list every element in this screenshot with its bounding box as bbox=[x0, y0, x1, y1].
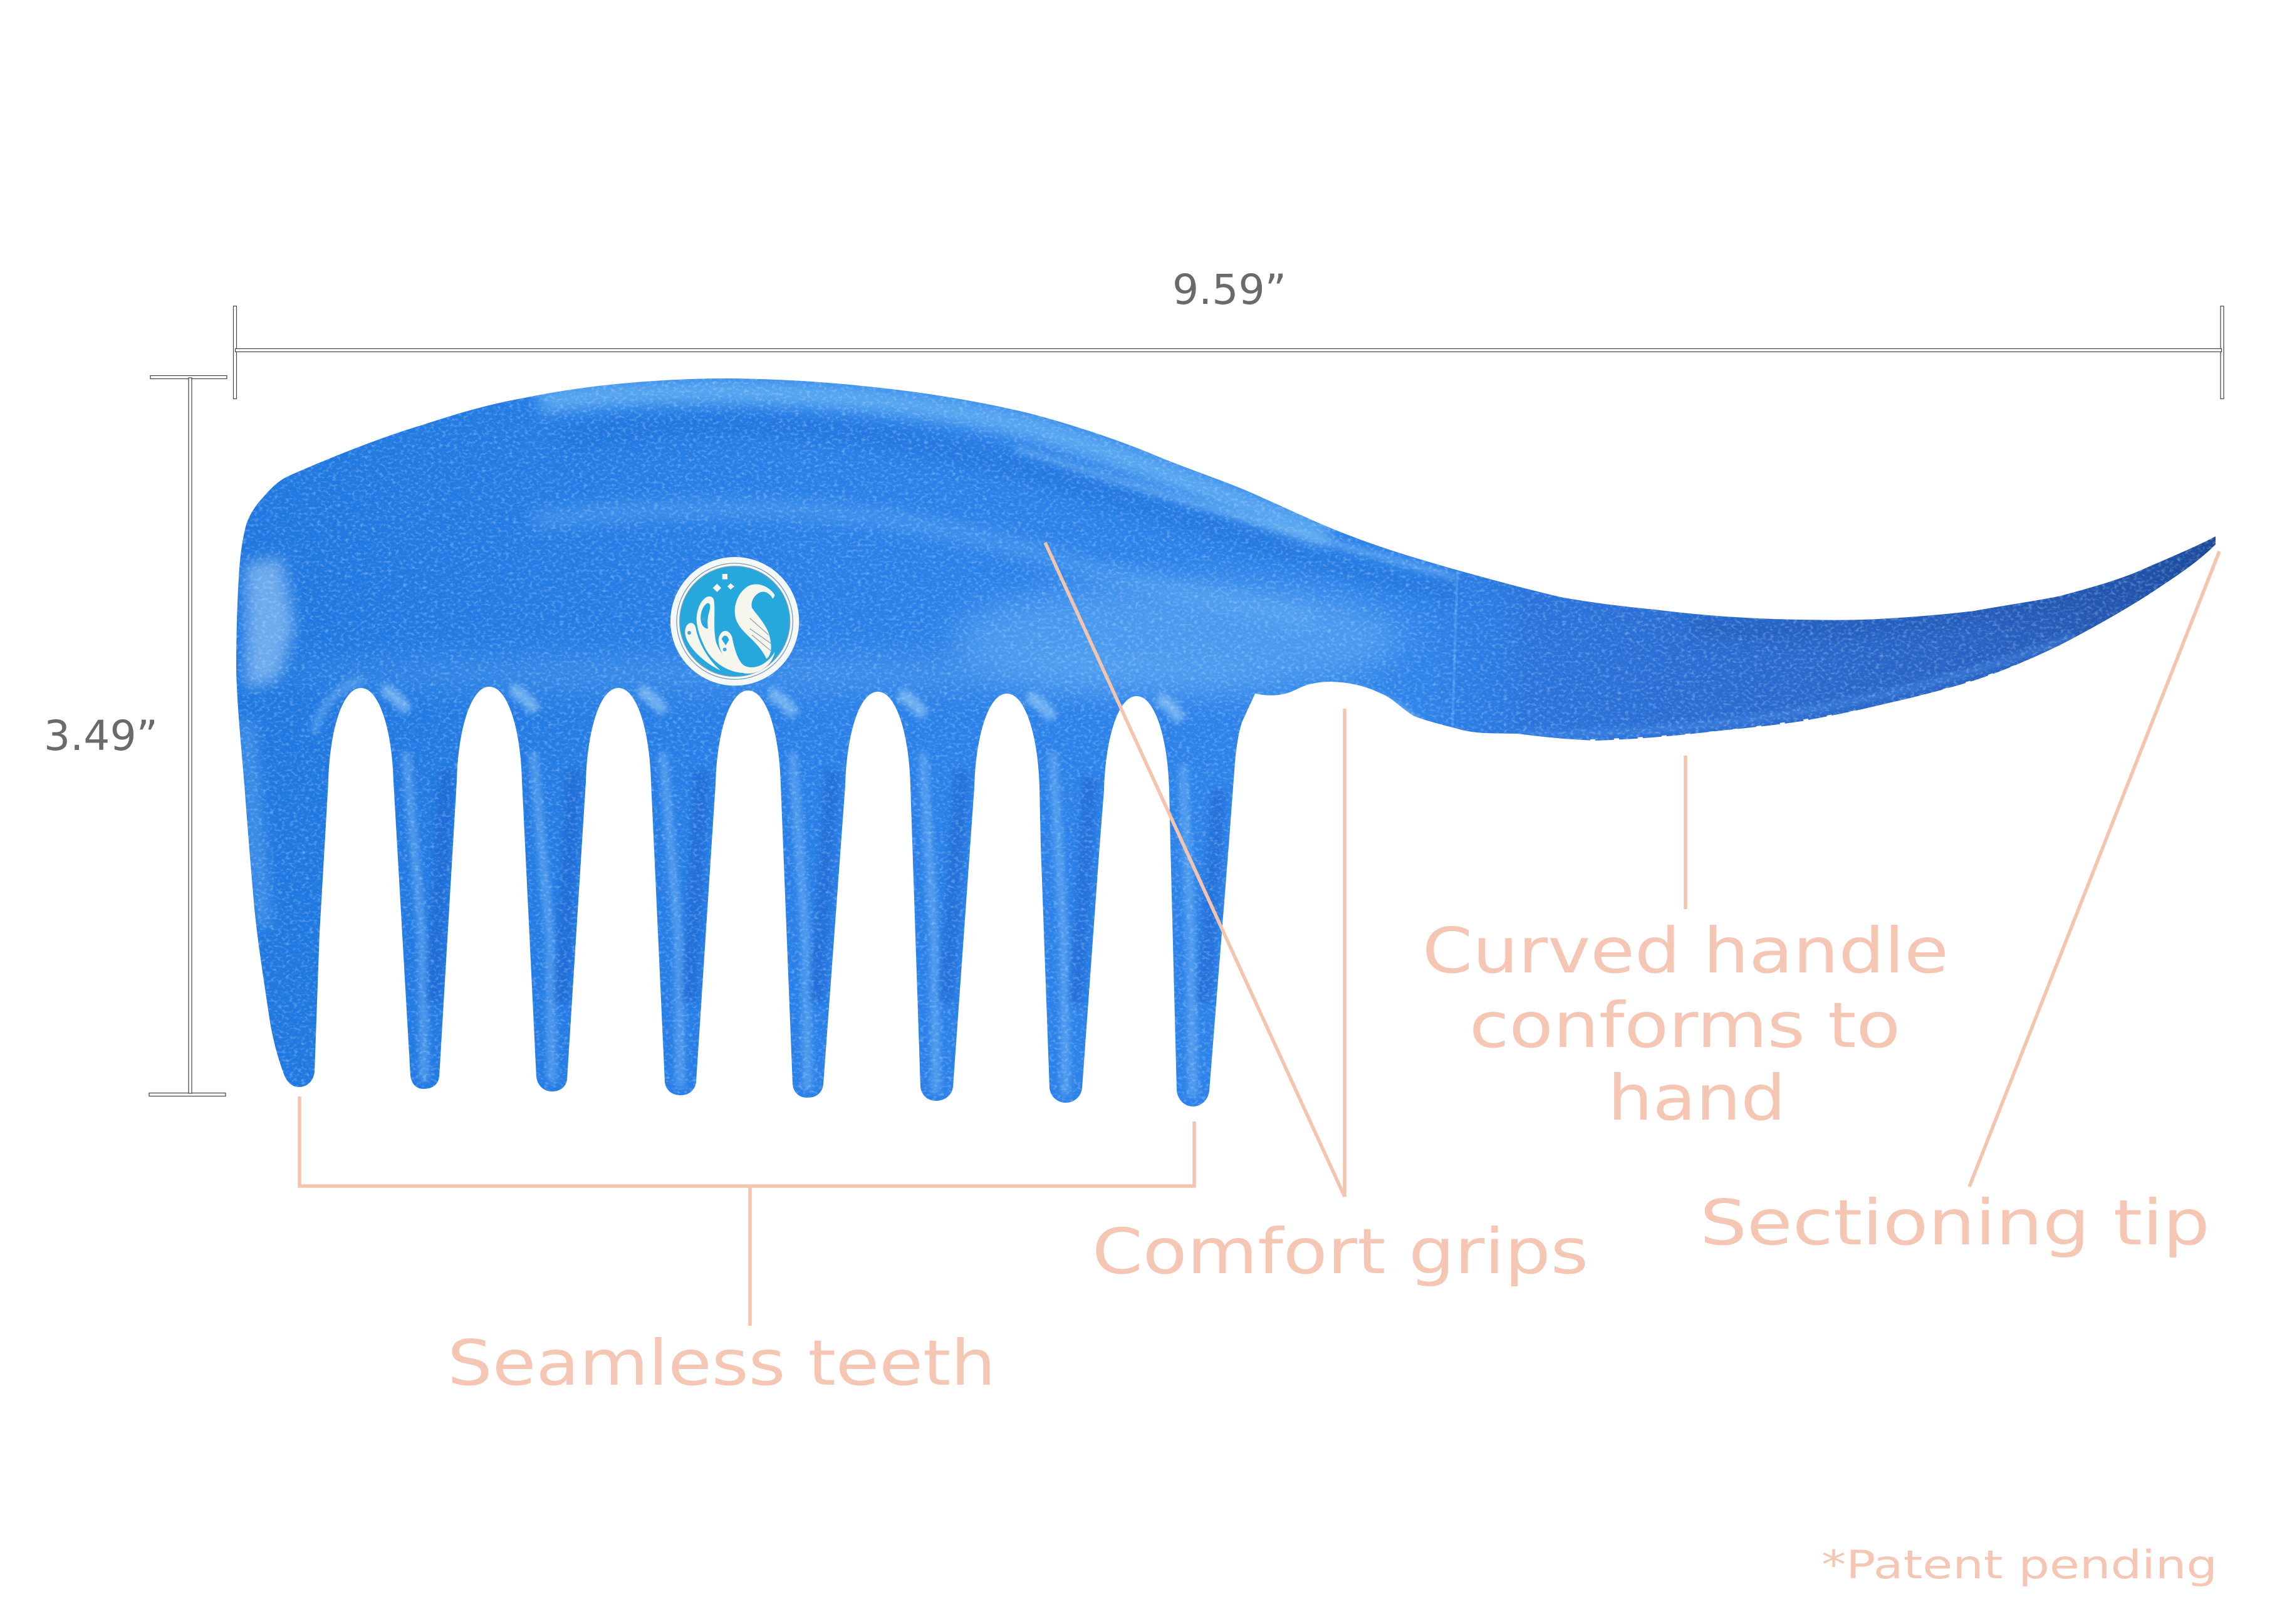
footnote: patent pending: *Patent pending bbox=[1821, 1542, 2217, 1588]
label: curved handle conforms to hand: conforms to bbox=[1469, 989, 1900, 1062]
height dimension: 3.49 inches bbox=[44, 376, 227, 1096]
label: sectioning tip: Sectioning tip bbox=[1700, 1186, 2210, 1259]
label: seamless teeth: Seamless teeth bbox=[447, 1326, 996, 1400]
width dimension: 9.59 inches bbox=[233, 266, 2224, 398]
logo badge: swan emblem bbox=[670, 557, 799, 685]
callout: sectioning tip bbox=[1700, 551, 2219, 1259]
callout: seamless teeth bbox=[300, 1096, 1194, 1400]
label: curved handle conforms to hand: Curved handle bbox=[1422, 914, 1949, 987]
callout: curved handle bbox=[1422, 756, 1949, 1135]
callout: comfort grips bbox=[1045, 543, 1588, 1288]
height value: 3.49” bbox=[44, 712, 158, 760]
width value: 9.59” bbox=[1172, 266, 1286, 314]
label: comfort grips: Comfort grips bbox=[1092, 1215, 1588, 1288]
label: curved handle conforms to hand: hand bbox=[1608, 1061, 1786, 1135]
blue wide-tooth comb bbox=[226, 370, 2224, 1115]
